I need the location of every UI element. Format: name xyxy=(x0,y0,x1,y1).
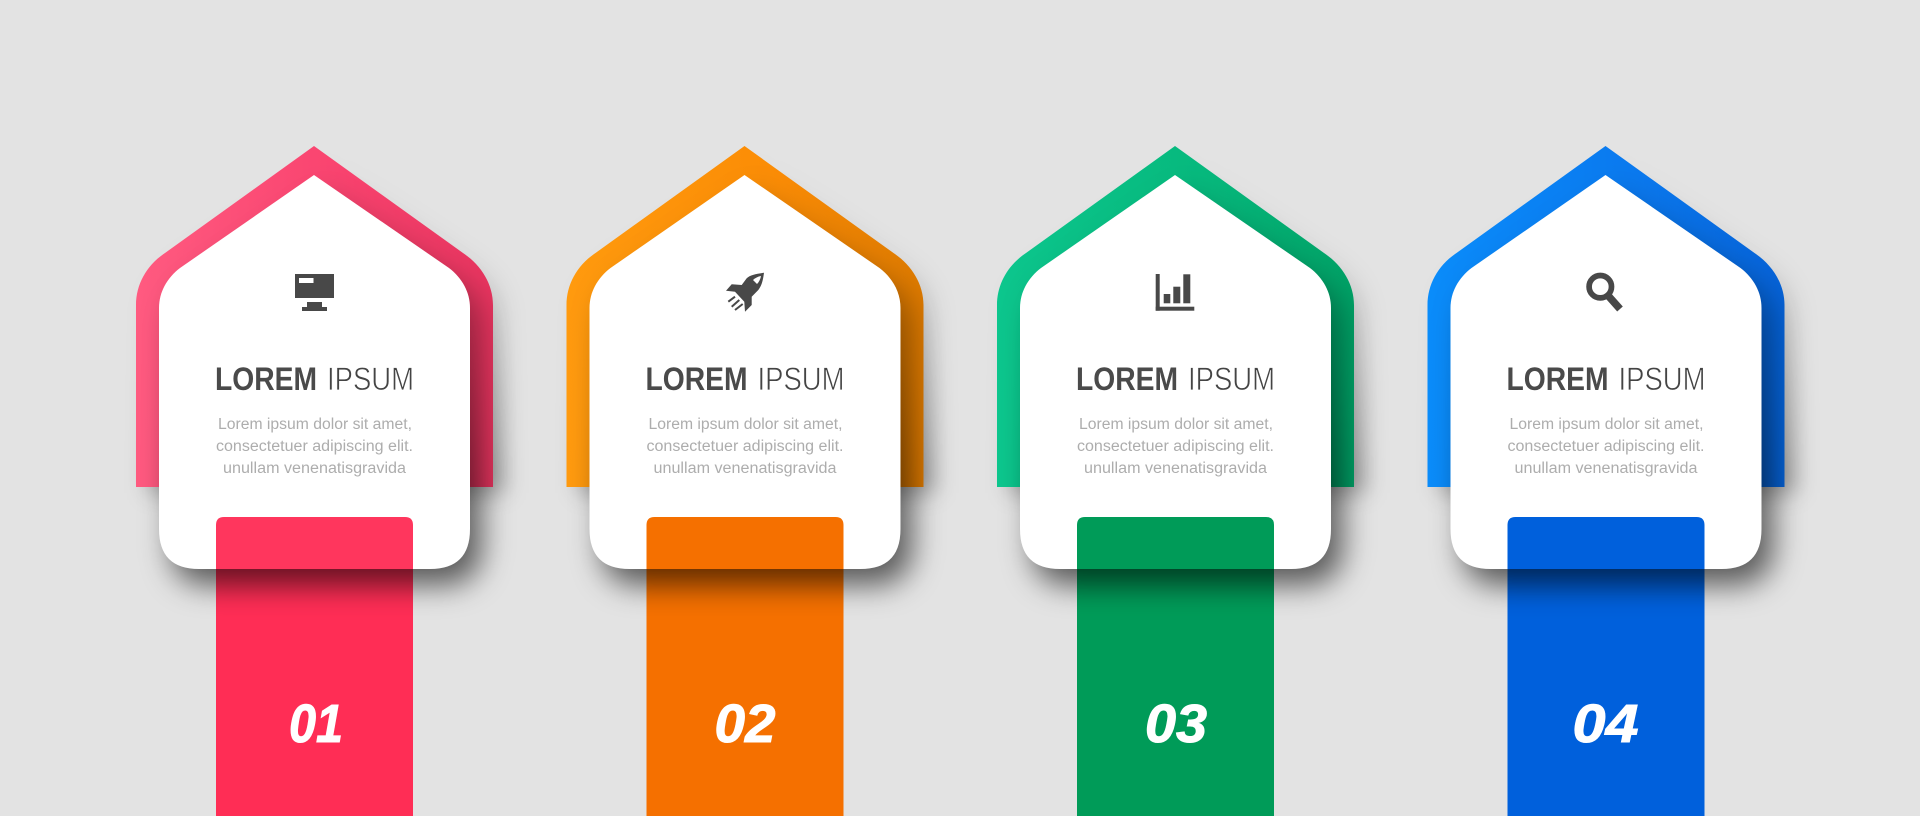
heading xyxy=(1506,361,1706,397)
number: 04 xyxy=(1572,694,1638,754)
heading: LOREM xyxy=(1076,361,1178,397)
outer arrow frame xyxy=(566,146,924,487)
number strip xyxy=(1508,540,1704,816)
description xyxy=(1077,416,1274,477)
outer arrow frame xyxy=(136,146,493,487)
heading xyxy=(1076,361,1275,397)
heading: LOREM xyxy=(215,361,317,397)
description: Lorem ipsum dolor sit amet, xyxy=(1510,416,1704,433)
description xyxy=(646,416,844,477)
description: consectetuer adipiscing elit. xyxy=(1077,438,1274,455)
description: Lorem ipsum dolor sit amet, xyxy=(648,416,842,433)
strip top fold xyxy=(1077,517,1274,569)
description: unullam venenatisgravida xyxy=(1514,460,1698,477)
description: consectetuer adipiscing elit. xyxy=(1508,438,1704,455)
icon: rocket xyxy=(726,273,764,312)
icon: magnifier xyxy=(1589,276,1620,309)
icon: bar chart xyxy=(1156,274,1194,311)
outer arrow shadow xyxy=(578,152,936,493)
heading: LOREM xyxy=(1506,361,1608,397)
outer arrow frame xyxy=(1428,146,1784,487)
card shadow xyxy=(1462,191,1774,585)
heading xyxy=(646,361,844,397)
white card xyxy=(1450,175,1762,569)
outer arrow shadow xyxy=(1440,152,1796,493)
number: 03 xyxy=(1145,694,1207,754)
description: unullam venenatisgravida xyxy=(654,460,837,477)
number strip xyxy=(646,540,844,816)
description: unullam venenatisgravida xyxy=(1084,460,1267,477)
card shadow xyxy=(602,191,912,585)
strip top fold xyxy=(1508,517,1704,569)
outer arrow shadow xyxy=(148,152,505,493)
strip top fold xyxy=(646,517,844,569)
white card xyxy=(1020,175,1331,569)
panel: step 03 xyxy=(997,146,1366,816)
white card xyxy=(590,175,900,569)
card shadow xyxy=(1032,191,1343,585)
description xyxy=(1508,416,1704,477)
heading xyxy=(215,361,414,397)
panel: step 04 xyxy=(1428,146,1796,816)
description: unullam venenatisgravida xyxy=(223,460,406,477)
description: consectetuer adipiscing elit. xyxy=(646,438,844,455)
heading: LOREM xyxy=(646,361,748,397)
number strip xyxy=(1077,540,1274,816)
heading: IPSUM xyxy=(758,361,844,397)
description: consectetuer adipiscing elit. xyxy=(216,438,413,455)
number strip xyxy=(216,540,413,816)
description xyxy=(216,416,413,477)
panel: step 02 xyxy=(566,146,936,816)
outer arrow frame xyxy=(997,146,1354,487)
white card xyxy=(159,175,470,569)
description: Lorem ipsum dolor sit amet, xyxy=(1079,416,1273,433)
number: 02 xyxy=(714,694,776,754)
heading: IPSUM xyxy=(1618,361,1706,397)
icon: monitor xyxy=(295,274,334,311)
number: 01 xyxy=(289,694,343,754)
heading: IPSUM xyxy=(1188,361,1275,397)
heading: IPSUM xyxy=(327,361,414,397)
card shadow xyxy=(171,191,482,585)
panel: step 01 xyxy=(136,146,505,816)
description: Lorem ipsum dolor sit amet, xyxy=(218,416,412,433)
strip top fold xyxy=(216,517,413,569)
outer arrow shadow xyxy=(1009,152,1366,493)
